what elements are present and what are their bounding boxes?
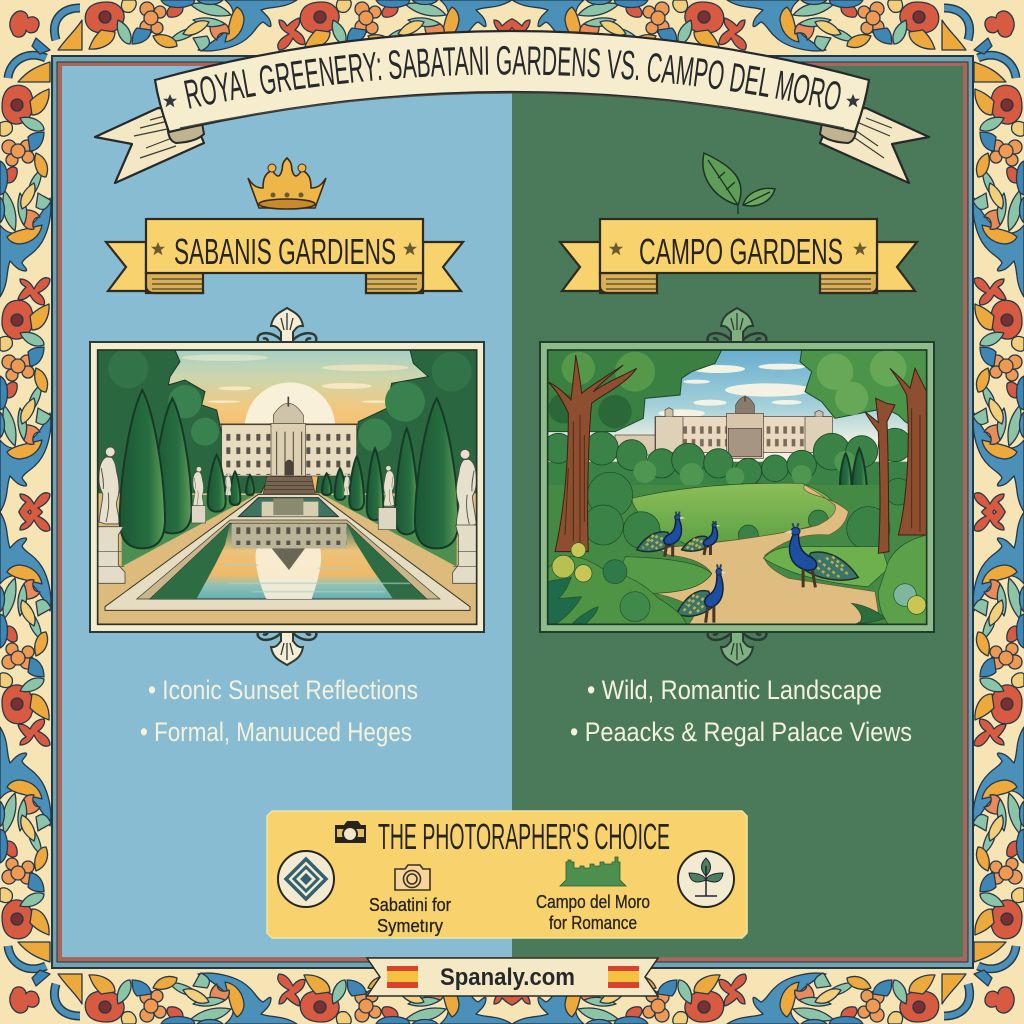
title text: ROYAL GREENERY: SABATANI GARDENS VS. CAMPO DEL MORO — [184, 46, 841, 110]
bullets: Sabatini — [140, 675, 418, 747]
bullets: Sabatini: • Iconic Sunset Reflections — [148, 675, 418, 705]
heading text: CAMPO GARDENS — [639, 231, 843, 272]
label: Sabatini — [369, 895, 451, 936]
label: Campo: Campo del Moro — [536, 892, 650, 912]
medallion: plant — [678, 851, 734, 907]
picture: Campo del Moro — [540, 308, 934, 665]
label: Campo: for Romance — [549, 913, 637, 933]
picture: Sabatini Gardens — [90, 308, 484, 665]
callout heading: THE PHOTORAPHER'S CHOICE — [378, 816, 670, 857]
bullets: Campo — [570, 675, 912, 747]
icon: leaf — [703, 153, 775, 214]
icon: camera outline — [395, 865, 430, 890]
bullets: Campo: • Wild, Romantic Landscape — [587, 675, 882, 705]
panel: blue left side — [62, 66, 512, 957]
icon: camera dark — [335, 821, 366, 843]
flag left — [387, 966, 418, 988]
callout: the photographer's choice — [267, 811, 747, 938]
medallion: geometric — [278, 851, 334, 907]
title banner — [94, 30, 930, 184]
heading ribbon: Campo Gardens — [560, 219, 917, 293]
panel: green right side — [512, 66, 963, 957]
site name: Spanaly.com — [440, 964, 575, 991]
icon: crown — [248, 158, 326, 209]
bullets: Campo: • Peaacks & Regal Palace Views — [570, 717, 912, 747]
footer ribbon — [367, 958, 658, 996]
label: Sabatini: Symetıry — [377, 916, 443, 936]
heading ribbon: Sabanis Gardens — [106, 219, 463, 293]
heading text: SABANIS GARDIENS — [174, 231, 396, 272]
bullets: Sabatini: • Formal, Manuuced Heges — [140, 717, 412, 747]
label: Sabatini: Sabatini for — [369, 895, 451, 915]
flag right — [608, 966, 639, 988]
icon: palace green — [560, 857, 626, 886]
label: Campo — [536, 892, 650, 933]
